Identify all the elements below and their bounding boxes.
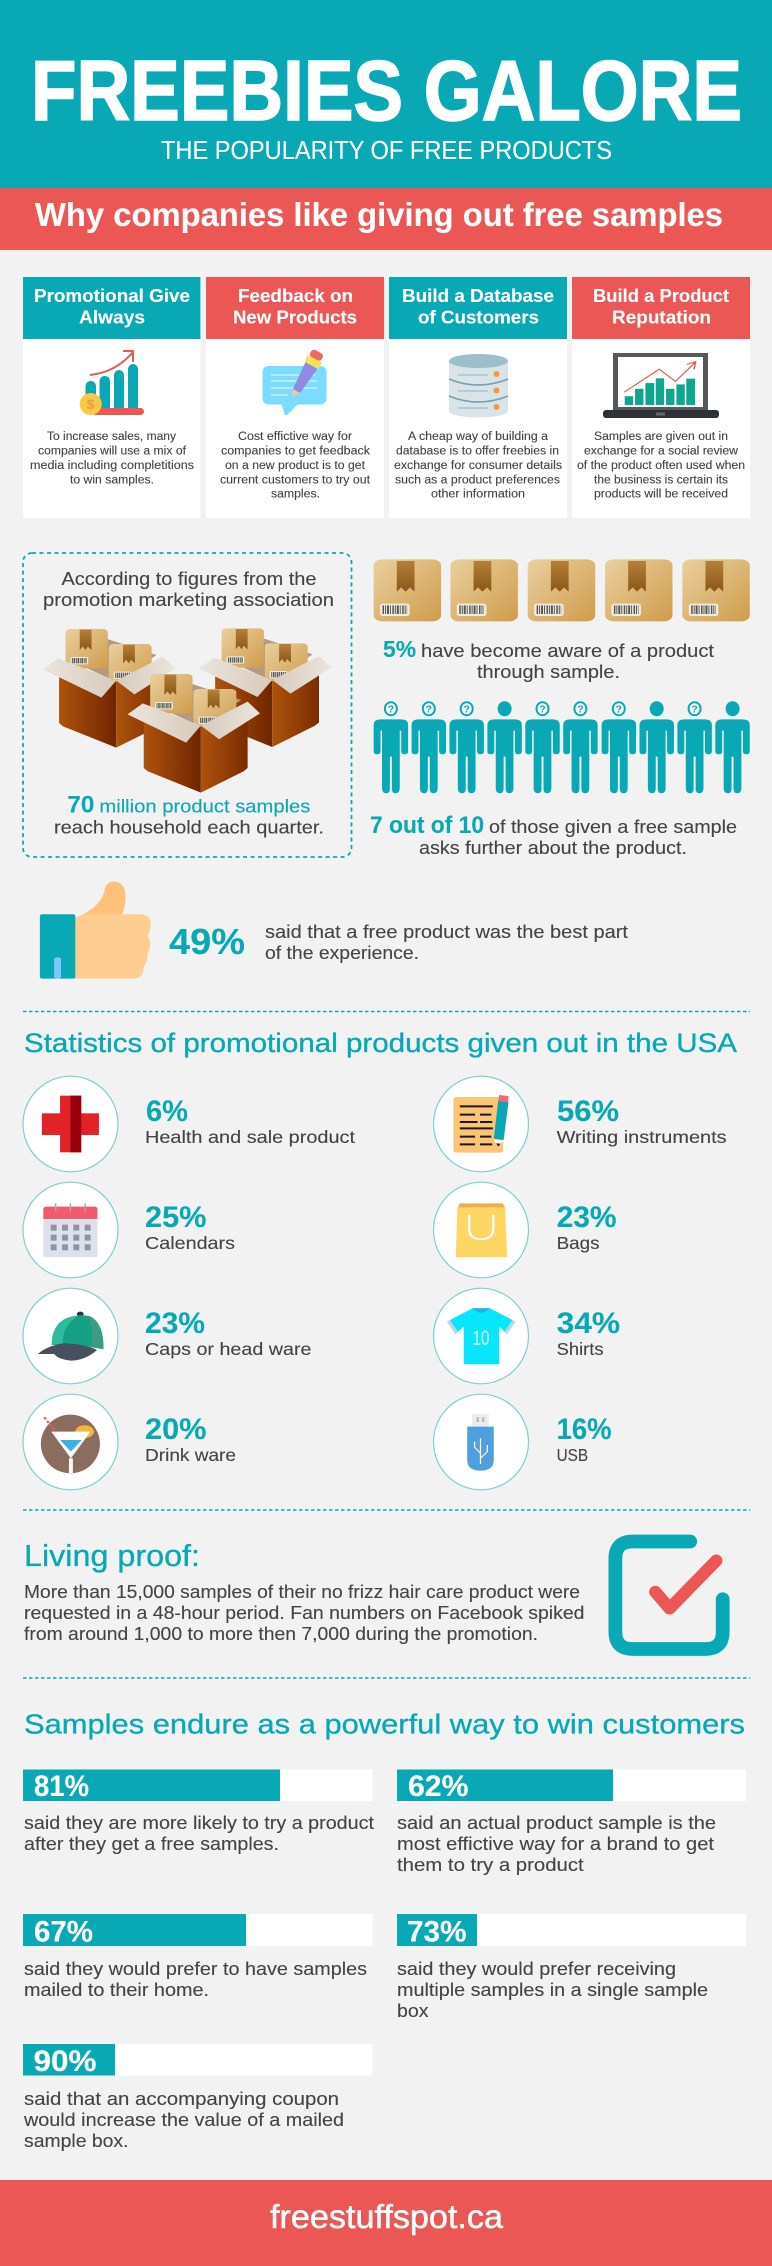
stat item: shirts: Shirts (557, 1339, 604, 1359)
stat bar: 62 percent: them to try a product (397, 1855, 584, 1875)
stat bar: 73 percent: said they would prefer receiving (397, 1959, 676, 1979)
icon: speech bubble and pencil (262, 349, 326, 415)
icon: database (449, 354, 508, 418)
stat bar: 67 percent: 67% (34, 1916, 93, 1948)
stat bar: 90 percent: 90% (34, 2045, 96, 2078)
panel: build a product reputation (572, 277, 750, 518)
card text: exchange for a social review (584, 446, 739, 458)
callout stat text: 70 (67, 792, 94, 819)
stat: 5 percent aware: have become aware of a product (421, 641, 714, 661)
living proof text: requested in a 48-hour period. Fan numbers on Facebook spiked (24, 1602, 584, 1623)
living proof heading: Living proof: (24, 1538, 200, 1573)
card heading (34, 286, 190, 328)
footer url: freestuffspot.ca (270, 2198, 504, 2235)
footer (0, 2180, 772, 2266)
card text: database is to offer freebies in (396, 446, 559, 458)
pictogram: five sample packages (374, 559, 750, 621)
card heading: Reputation (612, 308, 711, 328)
card text (30, 431, 194, 486)
stat item: shirts: 34% (557, 1307, 620, 1340)
stat bar: 73 percent: 73% (407, 1916, 466, 1948)
panel: 70 million samples callout (23, 553, 352, 857)
stat item: caps: Caps or head ware (145, 1339, 312, 1359)
stat item: usb: 16% (557, 1413, 612, 1446)
card heading (402, 286, 554, 328)
stat bar: 81 percent (23, 1770, 374, 1854)
card heading: Feedback on (238, 286, 353, 306)
pictogram: ten people, seven with questions: ? (464, 704, 470, 715)
icon: checkbox (615, 1542, 723, 1649)
icon: calendar (43, 1203, 97, 1257)
stat bar: 90 percent: sample box. (24, 2131, 128, 2151)
panel: build a database of customers (389, 277, 567, 518)
stat item: calendars: Calendars (145, 1233, 235, 1253)
panel: feedback on new products (206, 277, 384, 518)
icon: shirt: 10 (472, 1327, 490, 1350)
stat item: writing instruments (434, 1076, 727, 1172)
stat: 5 percent aware: 5% (383, 636, 416, 662)
card text (394, 431, 562, 501)
red section banner (0, 188, 772, 250)
card text (577, 431, 745, 501)
illustration: open boxes of samples (43, 628, 331, 793)
subtitle: THE POPULARITY OF FREE PRODUCTS (161, 135, 612, 165)
stat bar: 62 percent: 62% (408, 1770, 468, 1803)
stat: 49 percent: of the experience. (265, 943, 419, 963)
pictogram: ten people, seven with questions: ? (616, 704, 622, 715)
stat bar: 62 percent (397, 1770, 746, 1875)
stat bar: 81 percent: after they get a free samples. (24, 1834, 279, 1854)
icon: medical cross (42, 1096, 99, 1152)
stat bar: 62 percent: said an actual product sample is the (397, 1813, 716, 1833)
card heading: Promotional Give (34, 286, 190, 306)
callout stat text: reach household each quarter. (54, 818, 324, 838)
stat item: bags (434, 1182, 617, 1278)
card text: current customers to try out (220, 474, 371, 486)
pictogram: ten people, seven with questions: ? (692, 704, 698, 715)
living proof text: from around 1,000 to more then 7,000 during the promotion. (24, 1623, 538, 1644)
stat bar: 81 percent: said they are more likely to try a product (24, 1813, 374, 1833)
stat bar: 73 percent: box (397, 2001, 428, 2021)
card heading: Build a Database (402, 286, 554, 306)
living proof text: More than 15,000 samples of their no frizz hair care product were (24, 1581, 580, 1602)
card text: media including completitions (30, 460, 194, 472)
stat: 49 percent: said that a free product was the best part (265, 922, 628, 942)
icon: bar chart with coin (80, 351, 144, 415)
card text: such as a product preferences (395, 474, 560, 486)
card text: Cost effictive way for (238, 431, 352, 443)
stat: 49 percent (169, 921, 628, 963)
stat item: usb (434, 1394, 612, 1490)
pictogram: ten people, seven with questions (374, 701, 750, 793)
card text (220, 431, 371, 501)
banner heading: Why companies like giving out free samples (35, 196, 723, 233)
card heading: New Products (233, 308, 357, 328)
icon: usb stick (467, 1414, 494, 1471)
stat: 7 out of 10: asks further about the product. (419, 838, 687, 858)
stat item: drink ware (23, 1394, 236, 1490)
stat bar: 67 percent (23, 1914, 372, 2000)
stat bar: 90 percent (23, 2044, 372, 2151)
stat item: drink ware: 20% (145, 1413, 206, 1446)
card heading: of Customers (418, 308, 539, 328)
card text: To increase sales, many (47, 431, 176, 443)
stat item: health: 6% (146, 1095, 188, 1128)
icon: bar chart with coin: $ (87, 396, 95, 412)
stat item: health: Health and sale product (145, 1127, 355, 1147)
panel: living proof (24, 1538, 723, 1649)
stat item: shirts (434, 1288, 620, 1384)
stat bar: 67 percent: mailed to their home. (24, 1980, 209, 2000)
stat bar: 90 percent: would increase the value of a mailed (23, 2110, 344, 2130)
stat: 5 percent aware: through sample. (477, 662, 620, 682)
icon: shopping bag (456, 1203, 507, 1257)
icon: cocktail (41, 1415, 100, 1473)
pictogram: ten people, seven with questions: ? (577, 704, 583, 715)
stat: 49 percent: 49% (169, 921, 245, 962)
icon: cap (38, 1312, 103, 1361)
living proof text (24, 1581, 584, 1644)
card text: the business is certain its (594, 474, 728, 486)
stat item: writing instruments: Writing instruments (557, 1127, 727, 1147)
stat item: calendars: 25% (145, 1201, 206, 1234)
stat item: bags: Bags (557, 1233, 600, 1253)
card heading (233, 286, 357, 328)
callout intro text (43, 569, 334, 610)
card text: products will be received (594, 489, 728, 501)
stat bar: 81 percent: 81% (34, 1770, 89, 1803)
card text: samples. (271, 489, 320, 501)
stat bar: 62 percent: most effictive way for a brand to get (397, 1834, 714, 1854)
pictogram: ten people, seven with questions: ? (539, 704, 546, 715)
stat item: calendars (23, 1182, 235, 1278)
panel: promotional give always (23, 277, 200, 518)
stat bar: 67 percent: said they would prefer to have samples (24, 1959, 367, 1979)
icon: thumbs up (40, 882, 151, 979)
card heading: Build a Product (593, 286, 729, 306)
stat item: caps (23, 1288, 312, 1384)
pictogram: ten people, seven with questions: ? (426, 704, 432, 715)
callout stat text (54, 792, 324, 838)
stat bar: 90 percent: said that an accompanying coupon (24, 2089, 339, 2109)
callout intro text: promotion marketing association (43, 590, 334, 610)
card text: of the product often used when (577, 460, 745, 472)
icon: notepad and pencil (453, 1095, 509, 1153)
stat item: usb: USB (557, 1445, 588, 1465)
card heading: Always (79, 308, 145, 328)
pictogram: ten people, seven with questions: ? (388, 704, 394, 715)
stat item: health (23, 1076, 355, 1172)
stat item: bags: 23% (557, 1201, 617, 1234)
heading: samples endure: Samples endure as a powerful way to win customers (24, 1708, 745, 1740)
card text: to win samples. (70, 474, 154, 486)
callout intro text: According to figures from the (62, 569, 316, 589)
stat item: drink ware: Drink ware (145, 1445, 236, 1465)
card text: other information (431, 489, 525, 501)
card text: exchange for consumer details (394, 460, 562, 472)
card text: companies will use a mix of (38, 446, 187, 458)
stat bar: 73 percent (397, 1914, 746, 2021)
stat: 7 out of 10 (370, 812, 737, 858)
callout stat text: million product samples (99, 797, 310, 817)
heading: statistics: Statistics of promotional products given out in the USA (24, 1028, 737, 1058)
stat item: caps: 23% (145, 1307, 205, 1340)
card heading (593, 286, 729, 328)
header banner (0, 0, 772, 188)
stat bar: 73 percent: multiple samples in a single sample (397, 1980, 708, 2000)
stat: 5 percent aware (383, 636, 714, 682)
stat item: writing instruments: 56% (557, 1095, 619, 1128)
icon: laptop with chart (603, 353, 719, 418)
stat: 7 out of 10: 7 out of 10 (370, 812, 484, 839)
card text: Samples are given out in (594, 431, 728, 443)
card text: companies to get feedback (221, 446, 370, 458)
card text: A cheap way of building a (408, 431, 549, 443)
icon: shirt (447, 1308, 515, 1364)
stat: 7 out of 10: of those given a free sample (489, 817, 737, 837)
card text: on a new product is to get (225, 460, 366, 472)
